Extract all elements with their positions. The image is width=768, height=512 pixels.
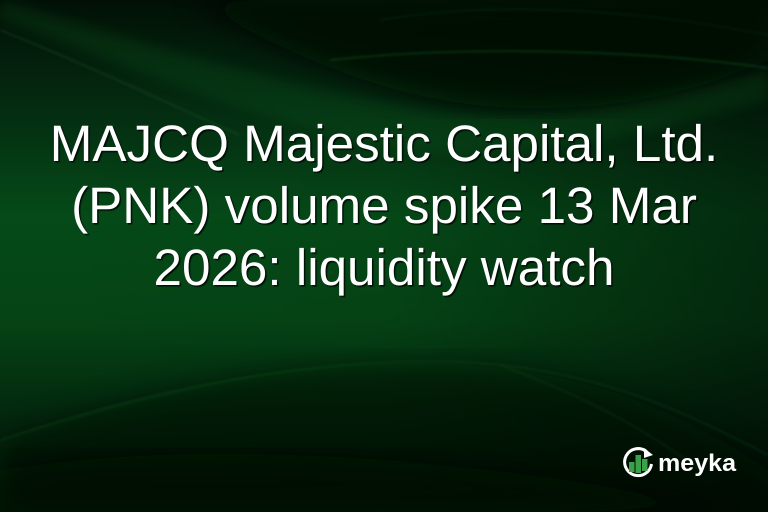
title: MAJCQ Majestic Capital, Ltd. [50,115,718,172]
logo: meyka [623,447,737,478]
title: (PNK) volume spike 13 Mar [71,177,697,234]
title: 2026: liquidity watch [154,239,614,296]
wordmark: meyka [658,450,737,477]
title [50,115,718,298]
icon: ring with bars [625,448,653,476]
